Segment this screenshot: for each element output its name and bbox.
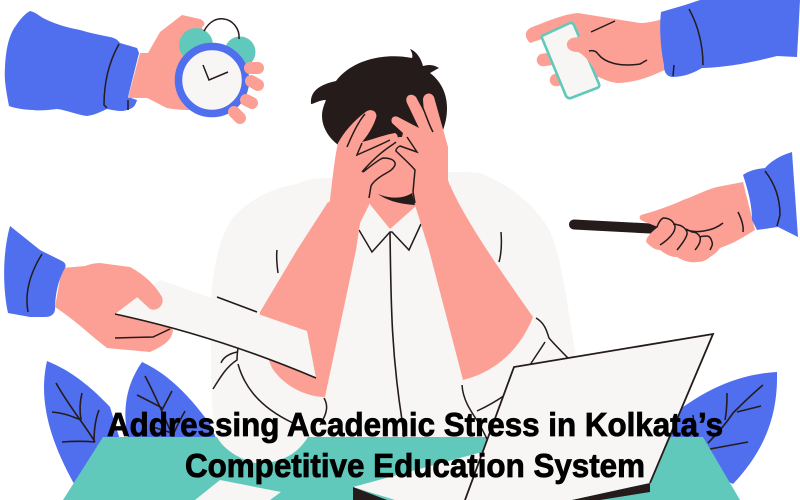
paper edge lines bbox=[115, 297, 316, 378]
finger line bbox=[115, 329, 170, 338]
hand bbox=[640, 182, 755, 262]
clock bells bbox=[179, 28, 213, 62]
hair bbox=[311, 49, 447, 146]
clock hands bbox=[203, 65, 228, 80]
mouth bbox=[378, 193, 415, 205]
thumb bbox=[110, 267, 163, 310]
shirt bbox=[210, 172, 575, 463]
clock handle bbox=[204, 19, 239, 39]
fingers bbox=[234, 68, 258, 118]
title bbox=[107, 406, 723, 484]
paper sheet bbox=[115, 280, 316, 378]
title line 1: Addressing Academic Stress in Kolkata’s bbox=[107, 406, 723, 443]
sleeve bbox=[660, 0, 800, 77]
sleeve bbox=[743, 152, 798, 237]
left hand on face bbox=[320, 110, 398, 250]
laptop screen bbox=[465, 334, 713, 500]
icon: left outer leaf bbox=[44, 361, 120, 500]
teal platform bbox=[63, 437, 740, 500]
leaves bbox=[44, 361, 777, 500]
laptop base shadow bbox=[353, 483, 650, 500]
hand with paper bbox=[4, 226, 316, 378]
title line 2: Competitive Education System bbox=[185, 447, 645, 484]
face and neck bbox=[360, 135, 420, 229]
laptop base bbox=[353, 452, 650, 500]
icon: left inner leaf bbox=[125, 362, 216, 438]
phone bbox=[542, 23, 599, 98]
thumb bbox=[567, 30, 675, 80]
pen bbox=[574, 224, 660, 229]
loose paper bbox=[195, 480, 281, 500]
fingers behind phone bbox=[543, 52, 610, 80]
finger lines bbox=[657, 212, 743, 250]
hand with pen bbox=[574, 152, 798, 262]
hand lines bbox=[589, 21, 647, 65]
laptop outline bbox=[465, 334, 713, 500]
cuff line bbox=[765, 171, 780, 226]
clock face bbox=[178, 46, 246, 114]
cuff line bbox=[27, 254, 42, 312]
sleeve bbox=[4, 226, 66, 317]
person bbox=[210, 49, 575, 463]
right hand on face bbox=[391, 93, 452, 205]
hand with clock bbox=[5, 11, 258, 118]
hand with phone bbox=[526, 0, 800, 98]
hand bbox=[128, 15, 215, 110]
hand bbox=[55, 263, 173, 352]
left arm bbox=[260, 202, 362, 397]
icon: right leaf bbox=[660, 372, 777, 484]
hand back bbox=[526, 13, 680, 83]
laptop bbox=[353, 334, 713, 500]
cuff lines bbox=[673, 9, 703, 76]
shirt fold and collar lines bbox=[213, 224, 568, 441]
sleeve bbox=[5, 11, 139, 116]
cuff lines bbox=[104, 44, 128, 110]
right arm bbox=[415, 185, 533, 380]
